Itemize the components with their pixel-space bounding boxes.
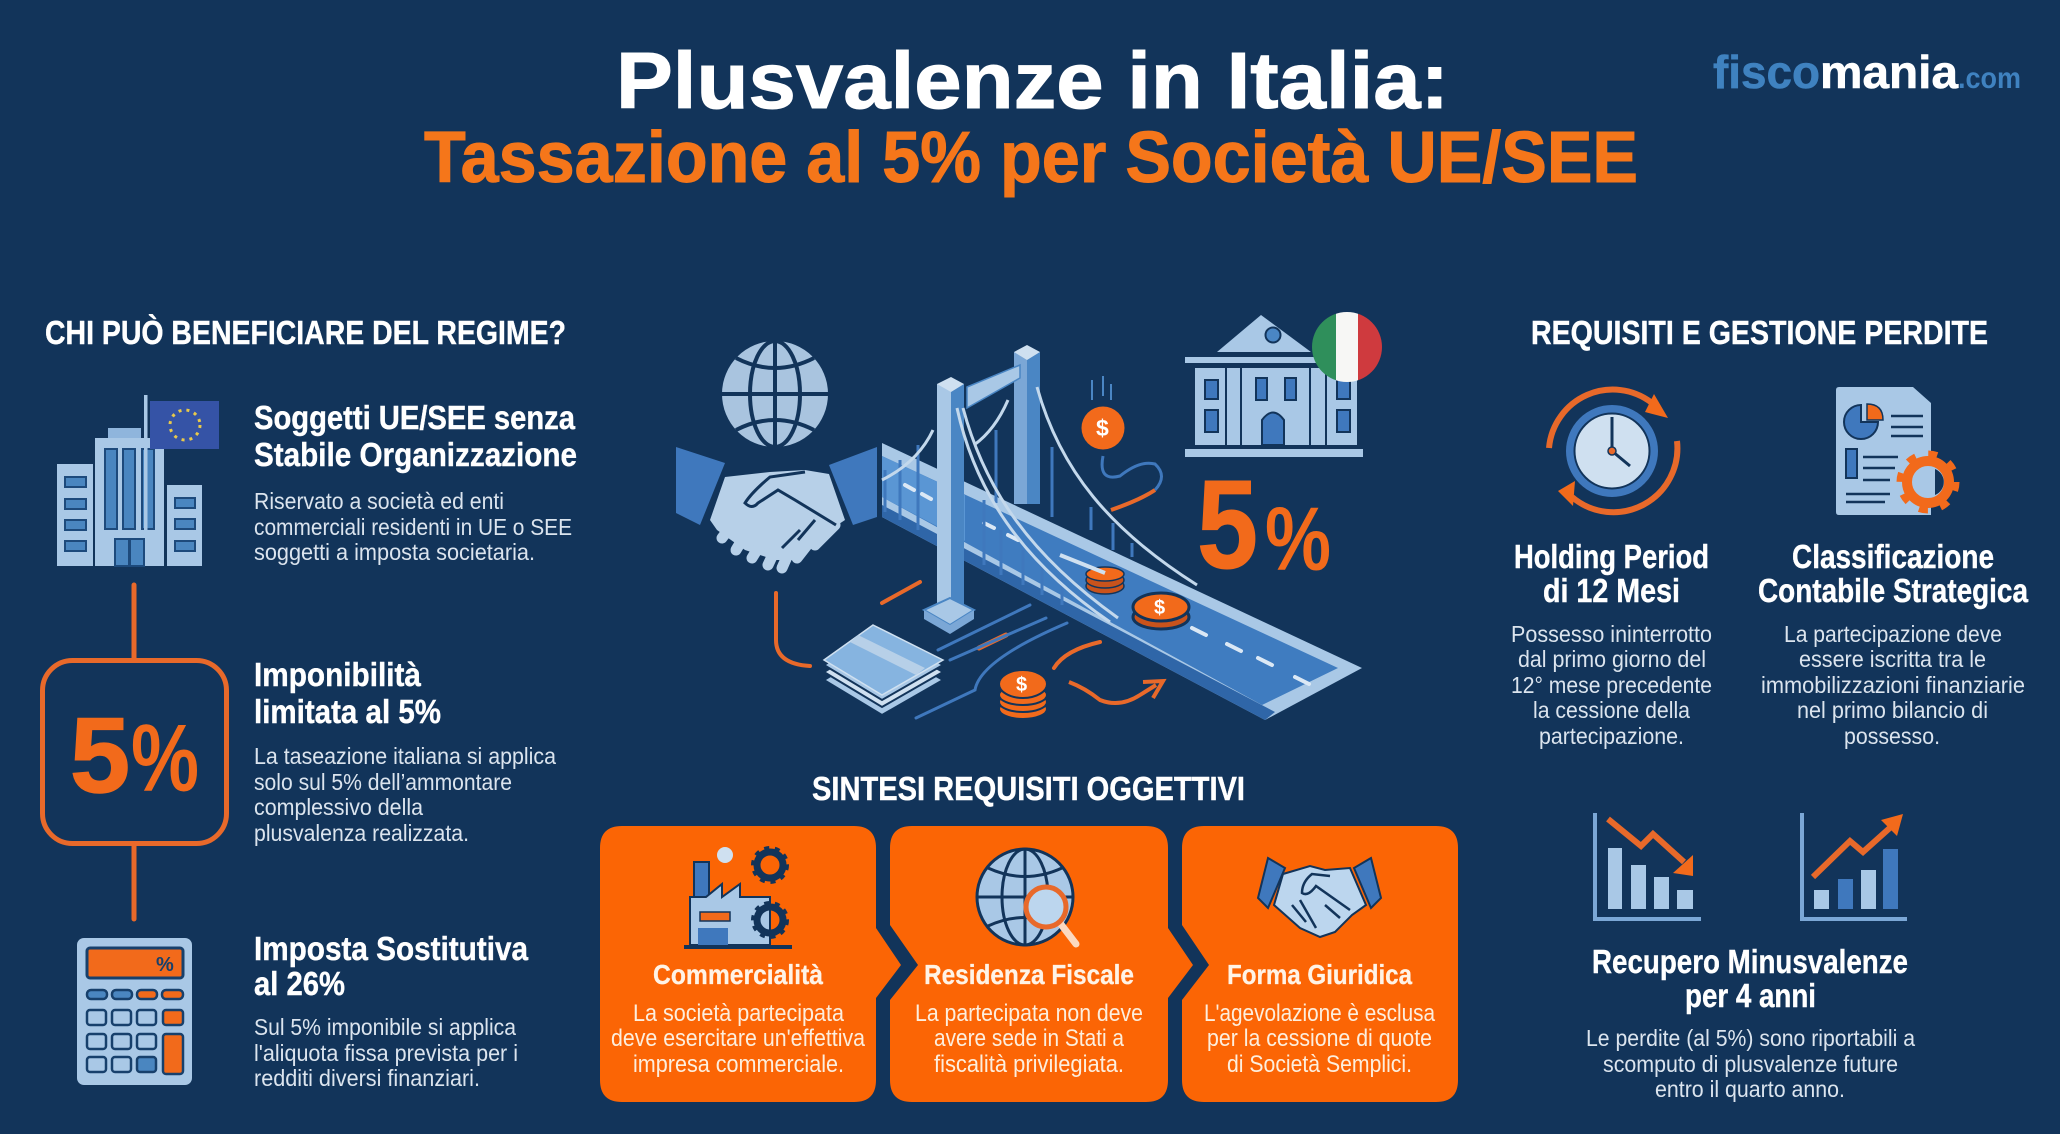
- title: [424, 36, 1638, 198]
- panel: residenza fiscale: avere sede in Stati a: [934, 1025, 1125, 1052]
- icon: 5% box: %: [131, 705, 199, 812]
- connector: top: [132, 585, 136, 660]
- title: Plusvalenze in Italia:: [616, 36, 1449, 125]
- text block: soggetti UE/SEE: commerciali residenti in UE o SEE: [254, 514, 572, 540]
- heading: sintesi requisiti: SINTESI REQUISITI OGGETTIVI: [812, 770, 1245, 807]
- icon: coin stack: $: [1016, 674, 1027, 696]
- text block: recupero minusvalenze: Le perdite (al 5%) sono riportabili a: [1586, 1025, 1915, 1051]
- text block: imposta sostitutiva: Sul 5% imponibile si applica: [254, 1014, 516, 1040]
- panel: forma giuridica: di Società Semplici.: [1227, 1051, 1412, 1078]
- icon: coins on road: $: [1154, 597, 1165, 619]
- icon: EU building with flag: [57, 395, 219, 566]
- text block: holding period: 12° mese precedente: [1511, 672, 1712, 698]
- text block: holding period: Possesso ininterrotto: [1511, 621, 1712, 647]
- panel: residenza fiscale: Residenza Fiscale: [924, 959, 1134, 990]
- text block: soggetti UE/SEE: Stabile Organizzazione: [254, 436, 577, 473]
- text block: imponibilità: complessivo della: [254, 794, 423, 820]
- logo: fiscomania.com: [1713, 46, 2021, 98]
- logo: fiscomania.com: .com: [1958, 62, 2021, 95]
- icon: document with gear: [1836, 387, 1956, 515]
- panel: residenza fiscale: [890, 826, 1193, 1102]
- icon: falling coin: $: [1096, 415, 1109, 441]
- panel: residenza fiscale: La partecipata non deve: [915, 1000, 1143, 1027]
- big 5%: [1197, 454, 1331, 595]
- heading: chi può beneficiare: CHI PUÒ BENEFICIARE DEL REGIME?: [45, 314, 566, 351]
- text block: classificazione: nel primo bilancio di: [1797, 697, 1988, 723]
- bridge cables: [882, 387, 1197, 622]
- central illustration: [676, 310, 1384, 720]
- text block: holding period: [1511, 538, 1712, 749]
- icon: calculator: [77, 938, 192, 1085]
- icon: Italian flag: [1312, 312, 1382, 382]
- text block: classificazione: [1758, 538, 2029, 749]
- text block: holding period: partecipazione.: [1539, 723, 1684, 749]
- panel: commercialità: [600, 826, 901, 1102]
- icon: globe: [722, 341, 828, 447]
- text block: holding period: di 12 Mesi: [1543, 572, 1680, 609]
- arrow: rising orange: [1069, 681, 1163, 703]
- title: Tassazione al 5% per Società UE/SEE: [424, 118, 1638, 198]
- big 5%: 5: [1197, 454, 1258, 595]
- panel: chi può beneficiare: [42, 314, 577, 1091]
- text block: classificazione: La partecipazione deve: [1784, 621, 2002, 647]
- icon: factory: [684, 847, 792, 949]
- text block: soggetti UE/SEE: [254, 399, 577, 565]
- text block: holding period: la cessione della: [1533, 697, 1690, 723]
- panel: forma giuridica: L'agevolazione è esclusa: [1204, 1000, 1436, 1027]
- text block: imposta sostitutiva: Imposta Sostitutiva: [254, 930, 529, 967]
- panel: requisiti e gestione perdite: [1511, 314, 2029, 1102]
- icon: 5% box: [42, 660, 226, 844]
- panel: residenza fiscale: fiscalità privilegiata.: [934, 1051, 1124, 1078]
- connector: bottom: [132, 845, 136, 919]
- text block: classificazione: immobilizzazioni finanziarie: [1761, 672, 2025, 698]
- panel: commercialità: La società partecipata: [633, 1000, 845, 1027]
- orange and blue route lines: [776, 582, 1100, 718]
- bridge deck: [882, 443, 1362, 720]
- logo: fiscomania.com: fisco: [1713, 46, 1820, 98]
- text block: imposta sostitutiva: l'aliquota fissa prevista per i: [254, 1040, 518, 1066]
- text block: imponibilità: La taseazione italiana si applica: [254, 743, 556, 769]
- panel: forma giuridica: per la cessione di quote: [1207, 1025, 1432, 1052]
- icon: calculator: %: [156, 954, 174, 976]
- text block: imposta sostitutiva: al 26%: [254, 965, 345, 1002]
- text block: holding period: Holding Period: [1514, 538, 1709, 575]
- text block: soggetti UE/SEE: Soggetti UE/SEE senza: [254, 399, 576, 436]
- chart: rising bars: [1802, 813, 1907, 919]
- text block: recupero minusvalenze: Recupero Minusvalenze: [1592, 943, 1908, 980]
- icon: handshake small: [1258, 858, 1381, 937]
- icon: falling coin: [1082, 376, 1162, 510]
- text block: classificazione: Classificazione: [1792, 538, 1994, 575]
- bridge hangers: [885, 430, 1132, 605]
- text block: recupero minusvalenze: entro il quarto anno.: [1655, 1076, 1845, 1102]
- logo: fiscomania.com: mania: [1820, 46, 1958, 98]
- heading: requisiti: REQUISITI E GESTIONE PERDITE: [1531, 314, 1988, 351]
- chart: falling bars: [1595, 813, 1701, 919]
- text block: classificazione: possesso.: [1844, 723, 1940, 749]
- icon: coins on road: [1060, 555, 1189, 629]
- panel: commercialità: deve esercitare un'effettiva: [611, 1025, 866, 1052]
- icon: bridge: [882, 345, 1362, 720]
- bridge crossbeam: [967, 365, 1020, 408]
- panel: commercialità: impresa commerciale.: [633, 1051, 844, 1078]
- big 5%: %: [1265, 490, 1331, 590]
- icon: coin stack: [999, 670, 1047, 719]
- icon: globe with magnifier: [977, 849, 1076, 945]
- text block: imponibilità: plusvalenza realizzata.: [254, 820, 469, 846]
- panel: forma giuridica: [1182, 826, 1458, 1102]
- text block: recupero minusvalenze: per 4 anni: [1685, 977, 1816, 1014]
- icon: handshake: [676, 447, 877, 568]
- icon: clock with arrows: [1549, 390, 1677, 512]
- text block: imposta sostitutiva: redditi diversi finanziari.: [254, 1065, 480, 1091]
- text block: classificazione: essere iscritta tra le: [1799, 646, 1986, 672]
- icon: Italian institution building: [1185, 315, 1363, 457]
- text block: imponibilità: [254, 656, 556, 846]
- text block: recupero minusvalenze: scomputo di plusvalenze future: [1603, 1051, 1898, 1077]
- text block: imponibilità: solo sul 5% dell’ammontare: [254, 769, 512, 795]
- text block: imposta sostitutiva: [254, 930, 529, 1091]
- bridge tower: far: [1014, 345, 1040, 504]
- panel: commercialità: Commercialità: [653, 959, 823, 990]
- panel: forma giuridica: Forma Giuridica: [1227, 959, 1412, 990]
- text block: imponibilità: Imponibilità: [254, 656, 422, 693]
- text block: imponibilità: limitata al 5%: [254, 693, 441, 730]
- text block: soggetti UE/SEE: Riservato a società ed enti: [254, 488, 504, 514]
- bridge tower: near: [924, 377, 974, 634]
- icon: 5% box: 5: [70, 695, 130, 815]
- text block: recupero minusvalenze: [1586, 943, 1915, 1102]
- text block: holding period: dal primo giorno del: [1518, 646, 1706, 672]
- text block: soggetti UE/SEE: soggetti a imposta societaria.: [254, 539, 535, 565]
- icon: cash stack: [824, 625, 943, 715]
